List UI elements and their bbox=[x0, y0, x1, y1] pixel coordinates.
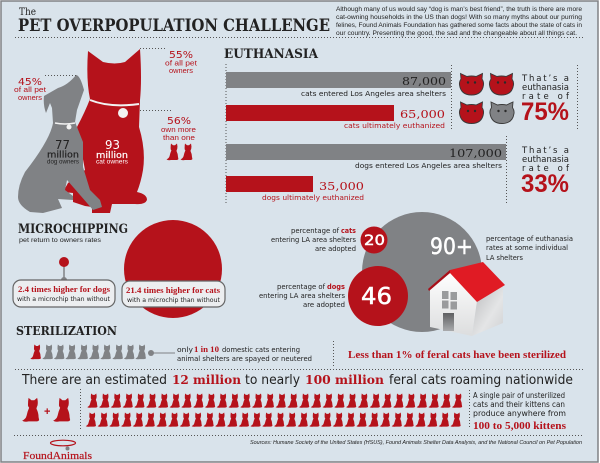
bar: dogs entered bbox=[226, 144, 506, 170]
stat: 46 dogs adopted: 46 bbox=[361, 284, 392, 310]
euthanasia heading: EUTHANASIA bbox=[224, 47, 319, 62]
bar: cats euthanized: 65,000 bbox=[400, 108, 445, 121]
intro text: cat-owning households in the US than dogs! With so many myths about our purring bbox=[336, 14, 582, 21]
kittens callout: produce anywhere from bbox=[473, 409, 566, 418]
callout: 75% euthanasia rate: 75% bbox=[521, 98, 569, 126]
banner: feral cats nationwide: feral cats roaming nationwide bbox=[389, 373, 573, 388]
microchipping heading: MICROCHIPPING bbox=[18, 222, 128, 237]
title: PET OVERPOPULATION CHALLENGE bbox=[18, 16, 330, 36]
kittens callout: cats and their kittens can bbox=[473, 400, 565, 409]
stat: 56% own more than one: than one bbox=[163, 133, 195, 142]
bar: cats entered: 87,000 bbox=[402, 75, 446, 88]
stat: 45% dog owners: owners bbox=[18, 93, 42, 102]
label: euthanasia rates: percentage of euthanasia bbox=[486, 235, 573, 243]
callout: 33% euthanasia rate: euthanasia bbox=[522, 155, 569, 165]
intro text: our country. Presenting the good, the sad and the changeable about all things cat. bbox=[336, 30, 577, 37]
bar: dogs euthanized bbox=[226, 176, 364, 202]
intro text: Although many of us would say “dog is man’s best friend”, the truth is there are more bbox=[336, 6, 582, 13]
label: euthanasia rates bbox=[486, 235, 573, 262]
bar: cats entered: cats entered Los Angeles area shelters bbox=[301, 90, 446, 98]
stat: 55% cat owners: 55% bbox=[169, 50, 193, 61]
cat row: 1 in 10 bbox=[30, 344, 146, 359]
bar: dogs entered: dogs entered Los Angeles area shelters bbox=[355, 162, 502, 170]
title bbox=[18, 7, 330, 36]
sterilization text: 1 in 10 bbox=[194, 345, 219, 354]
cat rows bbox=[86, 393, 462, 427]
stat: 77 million dog owners bbox=[47, 138, 80, 166]
kittens callout bbox=[473, 391, 566, 432]
bar: cats euthanized: cats ultimately euthanized bbox=[344, 122, 445, 130]
banner: feral cats nationwide: There are an estimated bbox=[21, 373, 167, 388]
label: dogs adopted bbox=[259, 283, 345, 309]
panel: pet ownership illustration bbox=[14, 48, 198, 213]
callout: feral cats sterilized: Less than 1% of feral cats have been sterilized bbox=[348, 350, 566, 361]
label: cats adopted: entering LA area shelters bbox=[271, 236, 356, 244]
logo: Found Animals: FoundAnimals bbox=[23, 450, 92, 462]
callout: 75% euthanasia rate: That’s a bbox=[521, 74, 569, 84]
bar: cats euthanized bbox=[226, 105, 445, 130]
sterilization text: only bbox=[177, 346, 193, 354]
intro text: felines, Found Animals Foundation has gathered some facts about the state of cats in bbox=[336, 22, 582, 29]
subheading: pet return to owners rates bbox=[19, 237, 102, 244]
icon: pair of cats: + bbox=[44, 406, 50, 418]
sterilization heading: STERILIZATION bbox=[16, 323, 117, 338]
label: cats adopted: are adopted bbox=[315, 245, 356, 253]
stat: 93 million cat owners: million bbox=[96, 151, 128, 161]
cat silhouette bbox=[63, 49, 147, 213]
label: dogs adopted: are adopted bbox=[303, 301, 345, 309]
title: The bbox=[19, 7, 36, 18]
stat: 77 million dog owners: million bbox=[47, 150, 79, 160]
panel: microchipping bbox=[13, 220, 225, 318]
stat: 45% dog owners: 45% bbox=[18, 77, 42, 88]
callout: 33% euthanasia rate: 33% bbox=[521, 170, 569, 198]
stat: 46 dogs adopted bbox=[348, 266, 408, 326]
label: dogs adopted: percentage of bbox=[277, 283, 326, 291]
bar: dogs euthanized: 35,000 bbox=[319, 180, 364, 193]
label: dogs adopted: dogs bbox=[327, 283, 345, 291]
banner: feral cats nationwide: 100 million bbox=[305, 373, 384, 387]
callout: dogs: with a microchip than without bbox=[17, 295, 110, 303]
logo: Found Animals bbox=[23, 440, 92, 462]
callout: 75% euthanasia rate bbox=[521, 74, 570, 126]
callout: cats: 21.4 times higher for cats bbox=[126, 286, 220, 295]
stat: 77 million dog owners: dog owners bbox=[47, 158, 80, 166]
stat: 93 million cat owners bbox=[96, 138, 129, 166]
callout: 75% euthanasia rate: euthanasia bbox=[522, 83, 569, 93]
kittens callout: A single pair of unsterilized bbox=[473, 391, 565, 400]
sterilization text: animal shelters are spayed or neutered bbox=[177, 355, 312, 363]
stat: 93 million cat owners: cat owners bbox=[96, 158, 129, 166]
stat: 20 cats adopted: 20 bbox=[364, 233, 385, 249]
stat: 90+: 90+ bbox=[430, 235, 473, 260]
cat proportion circle bbox=[124, 220, 222, 318]
callout: cats bbox=[122, 281, 225, 307]
dog proportion circle bbox=[59, 257, 69, 283]
stat: 56% own more than one: 56% bbox=[167, 116, 191, 127]
stat: 56% own more than one: own more bbox=[161, 125, 196, 134]
stat: 56% own more than one bbox=[161, 116, 196, 160]
bar: dogs euthanized: dogs ultimately euthanized bbox=[262, 194, 364, 202]
banner: feral cats nationwide: to nearly bbox=[245, 373, 300, 388]
icon: pair of cats bbox=[22, 398, 70, 422]
connector bbox=[148, 350, 175, 356]
stat: 55% cat owners bbox=[165, 50, 198, 75]
callout: cats: with a microchip than without bbox=[127, 296, 220, 304]
label: cats adopted bbox=[271, 227, 356, 253]
stat: 45% dog owners: of all pet bbox=[14, 85, 47, 94]
stat: 55% cat owners: owners bbox=[169, 66, 193, 75]
bar: cats entered bbox=[226, 72, 451, 98]
callout: 33% euthanasia rate: rate of bbox=[522, 164, 570, 174]
panel: adoption and shelters bbox=[259, 212, 573, 336]
dog collar bbox=[55, 123, 75, 130]
sources: Sources: Humane Society of the United States (HSUS), Found Animals Shelter Data Analysis, and the National Council on Pet Population bbox=[250, 440, 582, 446]
kittens callout: 100 to 5,000 kittens bbox=[473, 421, 566, 432]
label: cats adopted: percentage of bbox=[291, 227, 340, 235]
label: cats adopted: cats bbox=[341, 227, 356, 235]
banner: feral cats nationwide bbox=[21, 373, 573, 388]
banner: feral cats nationwide: 12 million bbox=[172, 373, 241, 387]
stat: 55% cat owners: of all pet bbox=[165, 58, 198, 68]
label: euthanasia rates: LA shelters bbox=[486, 254, 523, 262]
bar: dogs entered: 107,000 bbox=[449, 147, 502, 160]
cat collar bbox=[90, 100, 139, 118]
sterilization text: domestic cats entering bbox=[222, 346, 300, 354]
icon: house bbox=[428, 262, 505, 336]
panel: euthanasia bbox=[224, 47, 570, 202]
sterilization text bbox=[177, 345, 312, 363]
icons: cat faces 3 of 4 red bbox=[459, 74, 514, 124]
callout: 33% euthanasia rate bbox=[521, 146, 570, 198]
stat: 20 cats adopted bbox=[360, 226, 388, 254]
callout: dogs bbox=[13, 280, 115, 307]
dog silhouette bbox=[18, 75, 102, 213]
callout: dogs: 2.4 times higher for dogs bbox=[18, 285, 110, 294]
stat: 93 million cat owners: 93 bbox=[105, 138, 120, 152]
callout: 75% euthanasia rate: rate of bbox=[522, 92, 570, 102]
label: euthanasia rates: rates at some individual bbox=[486, 244, 568, 252]
stat: 77 million dog owners: 77 bbox=[55, 138, 70, 152]
panel: sterilization bbox=[16, 323, 566, 363]
callout: 33% euthanasia rate: That’s a bbox=[521, 146, 569, 156]
label: dogs adopted: entering LA area shelters bbox=[259, 292, 345, 300]
stat: 45% dog owners bbox=[14, 77, 47, 102]
intro text bbox=[336, 6, 582, 37]
gray euthanasia circle bbox=[362, 212, 482, 332]
